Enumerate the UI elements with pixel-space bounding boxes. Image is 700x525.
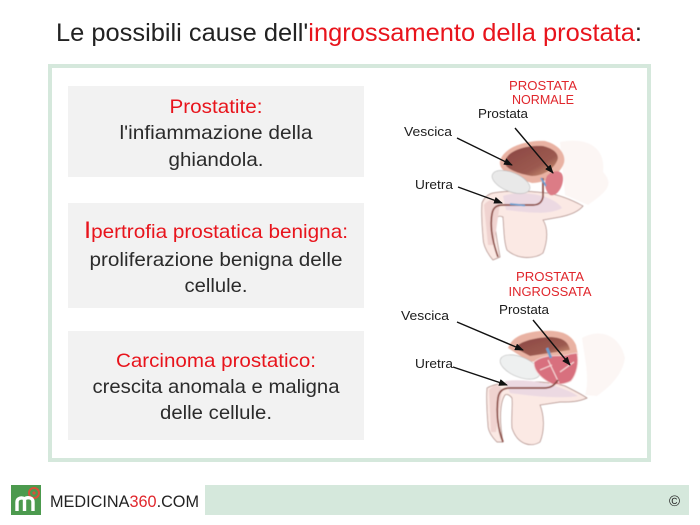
enlarged prostate heading (508, 270, 592, 299)
panel: prostatitis: Prostatite: (170, 96, 262, 118)
panel: benign prostatic hypertrophy: Ipertrofia prostatica benigna: (84, 217, 348, 244)
normal prostate heading: PROSTATA (509, 79, 578, 93)
footer band (11, 485, 689, 515)
normal labels and arrows (404, 106, 553, 203)
diagram: normal prostate (404, 79, 608, 260)
diagram: enlarged prostate (401, 270, 625, 445)
main panel (50, 66, 649, 460)
normal prostate heading: NORMALE (512, 93, 574, 107)
enlarged anatomy illustration (487, 331, 625, 445)
panel: prostatitis: ghiandola. (168, 149, 264, 171)
panel: prostate carcinoma: crescita anomala e maligna (92, 376, 340, 398)
normal labels and arrows: Vescica (404, 124, 453, 139)
panel: benign prostatic hypertrophy: proliferazione benigna delle (90, 249, 342, 271)
panel: prostatitis (68, 86, 364, 177)
normal labels and arrows: Prostata (478, 106, 529, 121)
enlarged labels and arrows: Vescica (401, 308, 450, 323)
footer logo (11, 485, 205, 515)
panel: prostatitis: l'infiammazione della (120, 122, 313, 144)
normal prostate heading (509, 79, 578, 107)
panel: benign prostatic hypertrophy: cellule. (184, 275, 248, 297)
enlarged prostate heading: INGROSSATA (508, 285, 592, 299)
enlarged labels and arrows: Uretra (415, 356, 454, 371)
panel: benign prostatic hypertrophy (68, 203, 364, 308)
panel: prostate carcinoma: Carcinoma prostatico: (116, 350, 316, 372)
copyright symbol: © (669, 493, 680, 510)
normal anatomy illustration (482, 141, 608, 260)
enlarged labels and arrows (401, 302, 570, 385)
footer logo: MEDICINA360.COM (50, 492, 199, 511)
enlarged prostate heading: PROSTATA (516, 270, 585, 284)
normal labels and arrows: Uretra (415, 177, 454, 192)
enlarged labels and arrows: Prostata (499, 302, 550, 317)
panel: prostate carcinoma (68, 331, 364, 440)
title: Le possibili cause dell'ingrossamento della prostata: (56, 19, 642, 47)
panel: prostate carcinoma: delle cellule. (160, 402, 272, 424)
